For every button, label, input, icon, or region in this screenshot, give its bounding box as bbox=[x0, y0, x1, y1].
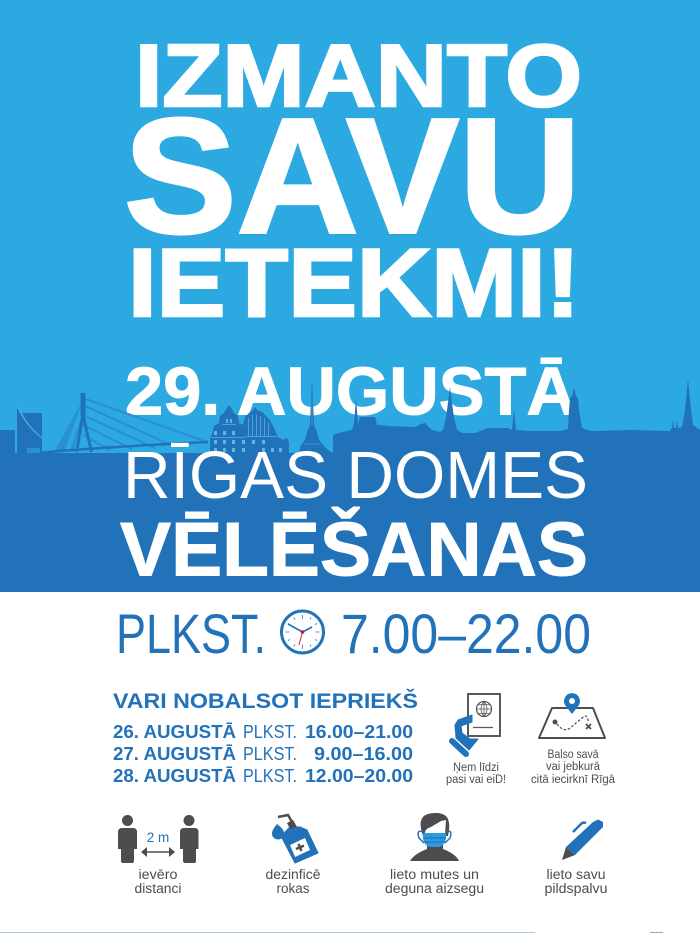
bottom edge mark bbox=[650, 932, 663, 933]
heading: elections: VĒLĒŠANAS bbox=[120, 508, 588, 592]
title: IETEKMI! bbox=[128, 230, 580, 337]
caption: distance bbox=[134, 867, 182, 896]
row: 26 August: PLKST. bbox=[243, 721, 297, 742]
row: 28 August: PLKST. bbox=[243, 765, 297, 786]
caption: map: vai jebkurā bbox=[546, 761, 601, 773]
caption: map: citā iecirknī Rīgā bbox=[531, 774, 616, 786]
title: IZMANTO bbox=[135, 26, 582, 125]
caption: map: Balso savā bbox=[548, 749, 599, 761]
icon: map with pin bbox=[539, 693, 605, 738]
caption: sanitize bbox=[266, 867, 320, 896]
row: 26 August: 26. AUGUSTĀ bbox=[113, 721, 236, 742]
church spire bbox=[298, 379, 335, 455]
row: 27 August: 9.00–16.00 bbox=[314, 743, 413, 764]
row: 28 August: 28. AUGUSTĀ bbox=[113, 765, 236, 786]
caption: passport: Ņem līdzi bbox=[453, 762, 499, 774]
panel: blue sky background bbox=[0, 0, 700, 460]
caption: sanitize: dezinficē bbox=[266, 867, 320, 882]
panel: white lower area bbox=[0, 592, 700, 933]
opening hours label: PLKST. bbox=[116, 603, 266, 665]
row: 26 August bbox=[113, 721, 413, 742]
black heads house and dome bbox=[210, 405, 289, 455]
house windows and ribs bbox=[211, 415, 282, 452]
caption: pen: pildspalvu bbox=[544, 881, 608, 896]
early voting schedule bbox=[113, 721, 413, 786]
left towers bbox=[0, 430, 15, 455]
city skyline bbox=[0, 379, 700, 455]
caption: pen: lieto savu bbox=[546, 867, 606, 882]
title: SAVU bbox=[124, 84, 581, 268]
row: 28 August: 12.00–20.00 bbox=[305, 765, 413, 786]
opening hours: 7.00–22.00 bbox=[341, 603, 591, 665]
caption: passport: pasi vai eiD! bbox=[446, 774, 506, 786]
caption: mask: lieto mutes un bbox=[390, 867, 479, 882]
row: 27 August bbox=[113, 743, 413, 764]
caption: distance: ievēro bbox=[138, 867, 178, 882]
icon: passport in hand bbox=[452, 694, 500, 754]
row: 27 August: 27. AUGUSTĀ bbox=[113, 743, 236, 764]
panel: dark blue band bbox=[0, 453, 700, 592]
row: 28 August bbox=[113, 765, 413, 786]
old town silhouette bbox=[333, 379, 700, 455]
caption: passport bbox=[446, 762, 506, 786]
icon: person wearing mask bbox=[410, 813, 459, 861]
caption: distance: distanci bbox=[134, 881, 182, 896]
caption: mask: deguna aizsegu bbox=[385, 881, 484, 896]
bottom edge line bbox=[0, 932, 535, 933]
caption: pen bbox=[544, 867, 608, 896]
icon: two people 2 m apart: 2 m bbox=[147, 830, 169, 845]
early voting heading: VARI NOBALSOT IEPRIEKŠ bbox=[113, 689, 418, 713]
date heading: 29. AUGUSTĀ bbox=[125, 354, 576, 430]
row: 26 August: 16.00–21.00 bbox=[305, 721, 413, 742]
caption: mask bbox=[385, 867, 484, 896]
icon: pen bbox=[562, 820, 603, 860]
title bbox=[124, 26, 582, 337]
heading: city council: RĪGAS DOMES bbox=[123, 439, 588, 513]
caption: sanitize: rokas bbox=[276, 881, 310, 896]
icon: two people 2 m apart bbox=[118, 815, 198, 863]
icon: clock bbox=[282, 611, 324, 653]
bridge bbox=[42, 393, 208, 452]
icon: hand sanitizer bbox=[272, 815, 318, 863]
row: 27 August: PLKST. bbox=[243, 743, 297, 764]
caption: map bbox=[531, 749, 616, 786]
